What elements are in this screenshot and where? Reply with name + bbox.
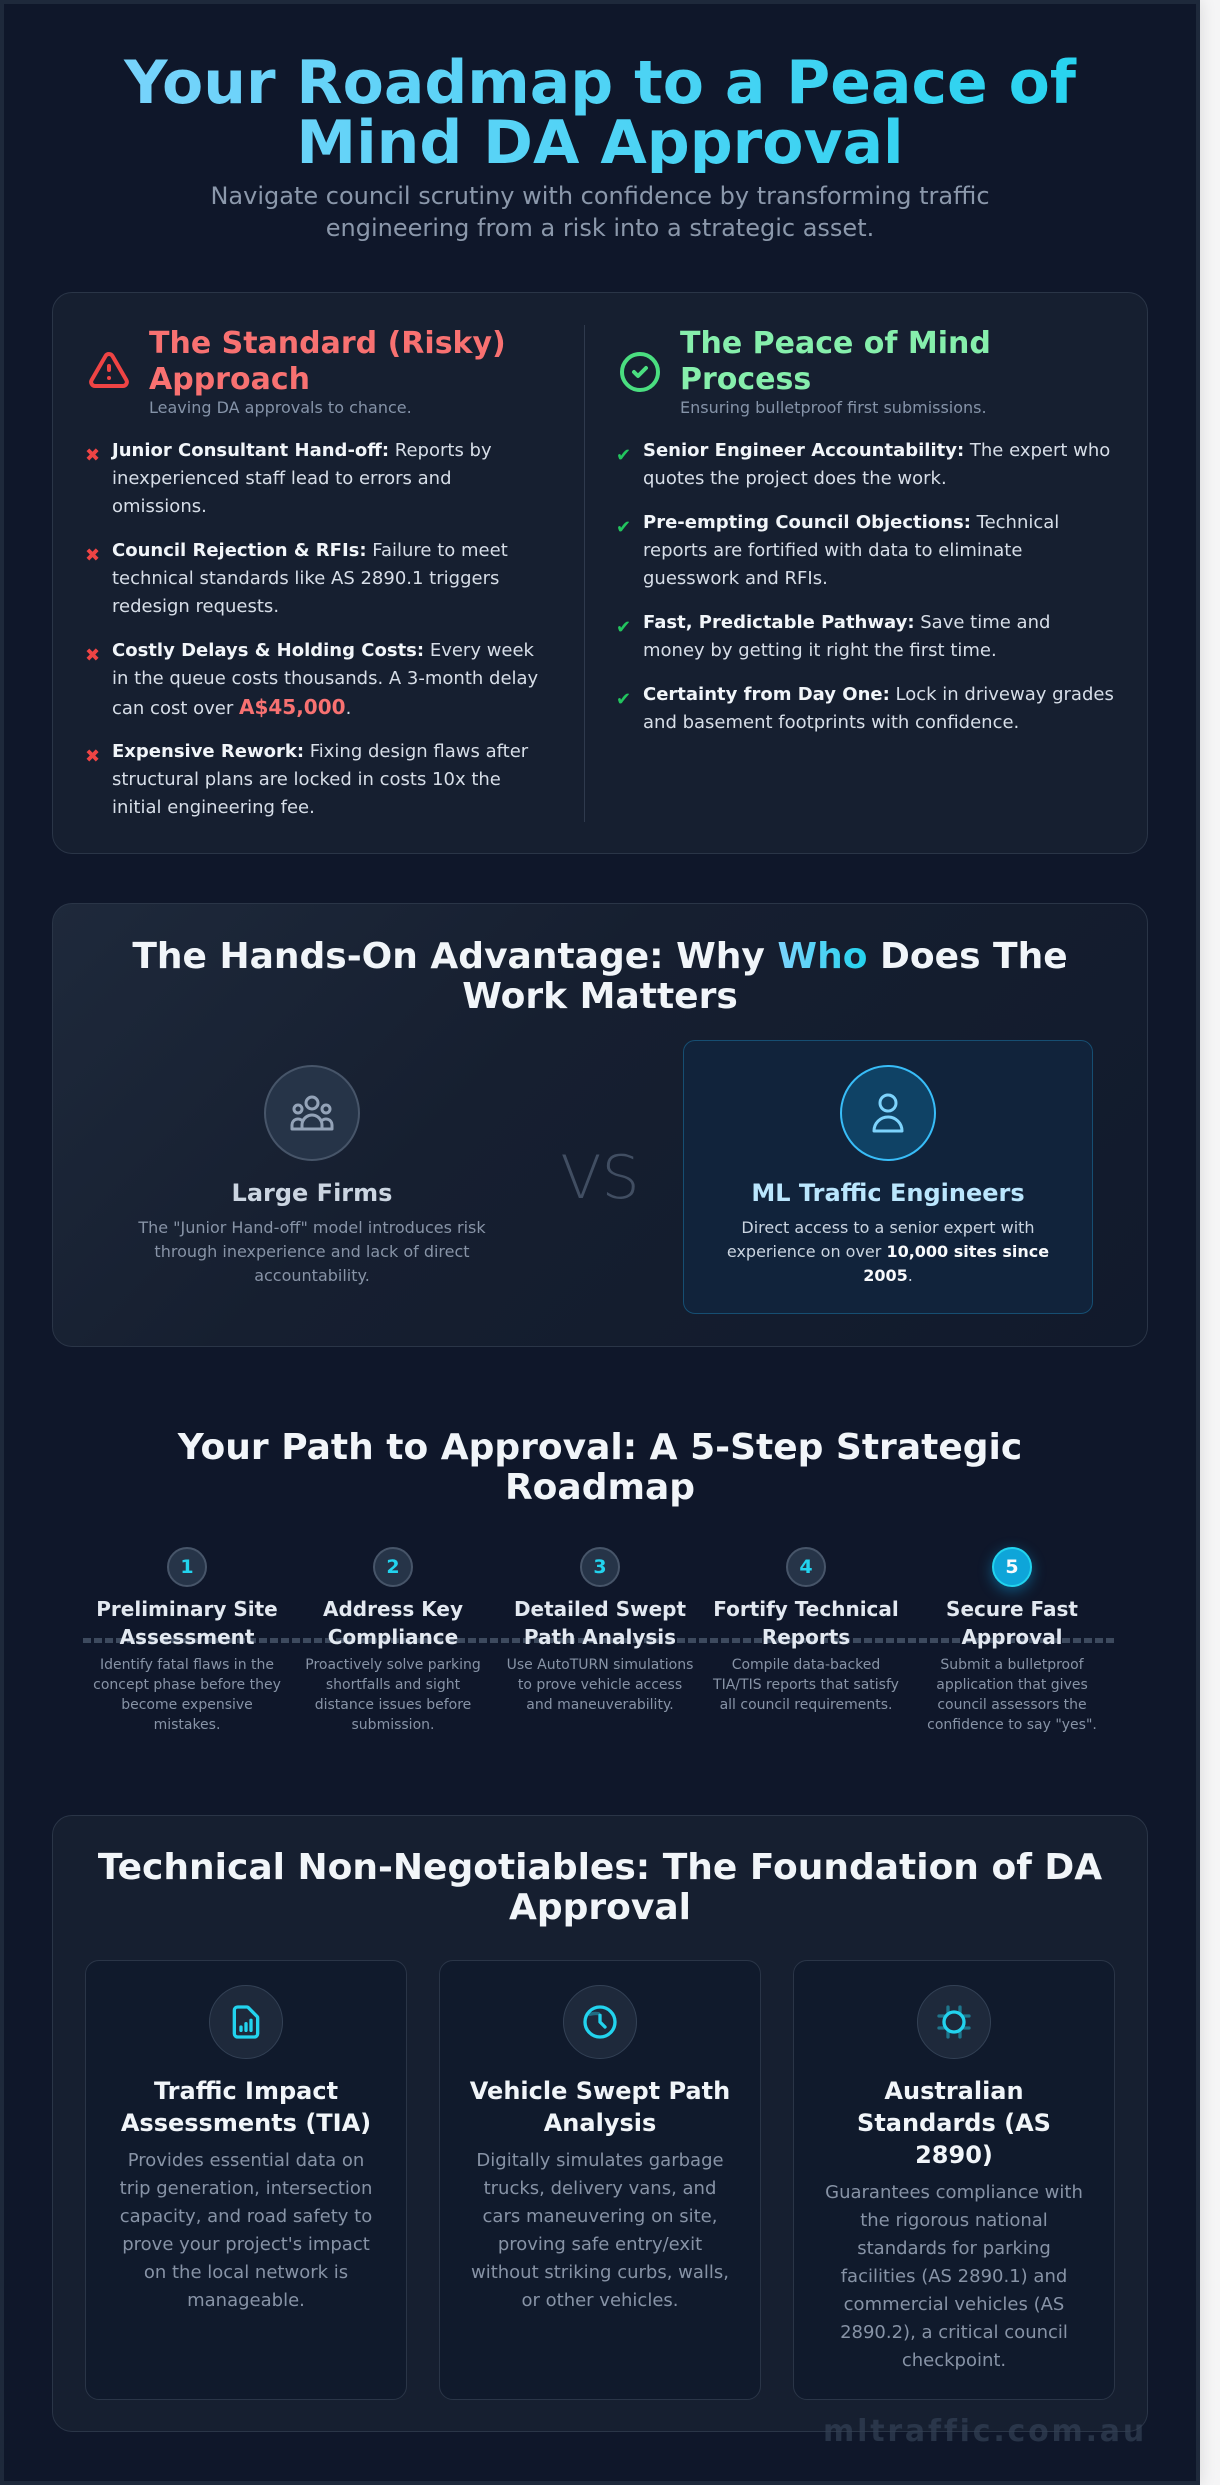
card text: trip generation, intersection [120, 2178, 372, 2199]
heading: standard approach [149, 326, 506, 397]
card title: Traffic Impact [154, 2077, 338, 2105]
title: Your Roadmap to a Peace of [124, 48, 1076, 118]
heading: hands-on advantage: The Hands-On Advantage: Why Who Does The [132, 936, 1068, 977]
subtitle [210, 182, 990, 242]
card title [857, 2077, 1051, 2169]
heading: path to approval: Roadmap [505, 1467, 695, 1508]
step text 4: all council requirements. [720, 1697, 892, 1713]
card text: capacity, and road safety to [120, 2206, 372, 2227]
marker: cross 2: ✖ [85, 545, 100, 566]
card title: Analysis [544, 2109, 656, 2137]
step number 5 [992, 1547, 1032, 1587]
subheading: standard approach: Leaving DA approvals to chance. [149, 398, 412, 417]
card text: manageable. [187, 2290, 305, 2311]
step title 5 [946, 1597, 1078, 1649]
step text 3: and maneuverability. [526, 1697, 674, 1713]
heading: technical non-negotiables: Technical Non-Negotiables: The Foundation of DA [98, 1847, 1102, 1888]
icon: warning triangle [89, 352, 129, 388]
text: large firms [138, 1218, 486, 1285]
step number 5: 5 [1005, 1556, 1019, 1578]
text: ML Traffic Engineers: experience on over 10,000 sites since [727, 1242, 1049, 1261]
card: vehicle swept path [439, 1960, 761, 2400]
step text 1 [93, 1657, 281, 1733]
card title: Assessments (TIA) [121, 2109, 371, 2137]
icon: single person [840, 1065, 936, 1161]
heading: peace of mind: Process [680, 362, 811, 397]
heading: peace of mind: The Peace of Mind [680, 326, 991, 361]
step text 4: Compile data-backed [732, 1657, 880, 1673]
card: ML Traffic Engineers [683, 1040, 1093, 1314]
step 2 [305, 1547, 481, 1733]
card text: trucks, delivery vans, and [484, 2178, 716, 2199]
item: costly delays: can cost over A$45,000. [112, 695, 351, 719]
step text 5: council assessors the [937, 1697, 1087, 1713]
card text [471, 2150, 729, 2311]
step text 5: confidence to say "yes". [927, 1717, 1097, 1733]
heading: technical non-negotiables [98, 1847, 1102, 1928]
step title 5: Approval [961, 1625, 1063, 1649]
icon: document chart [209, 1985, 283, 2059]
marker: check 3: ✔ [616, 617, 631, 638]
text: ML Traffic Engineers: Direct access to a senior expert with [741, 1218, 1035, 1237]
heading: peace of mind [680, 326, 991, 397]
marker: check 2: ✔ [616, 517, 631, 538]
item: senior engineer: quotes the project does the work. [643, 468, 947, 489]
item: senior engineer [643, 440, 1110, 489]
subtitle: engineering from a risk into a strategic asset. [326, 214, 874, 242]
marker: check 4: ✔ [616, 689, 631, 710]
step number 3 [580, 1547, 620, 1587]
step title 2: Address Key [323, 1597, 463, 1621]
step text 2: Proactively solve parking [305, 1657, 481, 1673]
item: certainty: Certainty from Day One: Lock in driveway grades [643, 684, 1114, 705]
step text 5 [927, 1657, 1097, 1733]
item: expensive rework [112, 741, 528, 818]
step 4 [712, 1547, 899, 1713]
heading: hands-on advantage [132, 936, 1068, 1017]
item: certainty: and basement footprints with confidence. [643, 712, 1019, 733]
card text: on the local network is [144, 2262, 348, 2283]
marker: cross 3: ✖ [85, 645, 100, 666]
step number 1 [167, 1547, 207, 1587]
step text 2: submission. [352, 1717, 434, 1733]
item: costly delays: in the queue costs thousands. A 3-month delay [112, 668, 538, 689]
subheading: peace of mind: Ensuring bulletproof first submissions. [680, 398, 987, 417]
item: predictable pathway [643, 612, 1050, 661]
step text 2: distance issues before [315, 1697, 471, 1713]
step text 3: to prove vehicle access [518, 1677, 682, 1693]
card title: 2890) [915, 2141, 993, 2169]
step title 5: Secure Fast [946, 1597, 1078, 1621]
marker: cross 4: ✖ [85, 746, 100, 767]
item: council rejection [112, 540, 508, 617]
text: large firms: The "Junior Hand-off" model introduces risk [138, 1218, 486, 1237]
item: certainty [643, 684, 1114, 733]
step title 2 [323, 1597, 463, 1649]
title: Mind DA Approval [296, 108, 904, 178]
card: australian standards [793, 1960, 1115, 2400]
step title 2: Compliance [328, 1625, 458, 1649]
step 1 [93, 1547, 281, 1733]
text: large firms: accountability. [254, 1266, 370, 1285]
item: predictable pathway: Fast, Predictable Pathway: Save time and [643, 612, 1050, 633]
card text: 2890.2), a critical council [840, 2322, 1068, 2343]
step title 3: Detailed Swept [514, 1597, 686, 1621]
step title 3: Path Analysis [524, 1625, 676, 1649]
item: junior hand-off [111, 440, 492, 517]
card text [794, 2179, 1114, 2375]
heading: path to approval [177, 1427, 1022, 1508]
step number 1: 1 [180, 1556, 194, 1578]
text: large firms: through inexperience and lack of direct [154, 1242, 470, 1261]
item: pre-empting objections: reports are fortified with data to eliminate [643, 540, 1022, 561]
item: council rejection: Council Rejection & RFIs: Failure to meet [112, 540, 508, 561]
marker: check 1: ✔ [616, 445, 631, 466]
heading: ML Traffic Engineers: ML Traffic Engineers [751, 1179, 1025, 1207]
step text 1: mistakes. [154, 1717, 220, 1733]
step number 2: 2 [386, 1556, 400, 1578]
step number 3: 3 [593, 1556, 607, 1578]
item: pre-empting objections: guesswork and RFIs. [643, 568, 828, 589]
step text 1: concept phase before they [93, 1677, 281, 1693]
step text 4: TIA/TIS reports that satisfy [713, 1677, 899, 1693]
step text 1: become expensive [121, 1697, 253, 1713]
step text 2: shortfalls and sight [326, 1677, 460, 1693]
heading: technical non-negotiables: Approval [509, 1887, 691, 1928]
icon: clock [563, 1985, 637, 2059]
panel: technical non-negotiables [52, 1815, 1148, 2432]
card text: commercial vehicles (AS [844, 2294, 1064, 2315]
step text 5: Submit a bulletproof [940, 1657, 1084, 1673]
subtitle: Navigate council scrutiny with confidence by transforming traffic [210, 182, 990, 210]
divider [584, 325, 585, 822]
VS label: VS [560, 1143, 640, 1213]
step 5 [927, 1544, 1097, 1733]
list: peace of mind items [616, 440, 1114, 733]
card text: cars maneuvering on site, [483, 2206, 717, 2227]
item: expensive rework: Expensive Rework: Fixing design flaws after [112, 741, 528, 762]
icon: check circle [620, 352, 660, 392]
card text: facilities (AS 2890.1) and [841, 2266, 1067, 2287]
heading: standard approach: Approach [149, 362, 310, 397]
card title [470, 2077, 730, 2137]
step text 3: Use AutoTURN simulations [507, 1657, 693, 1673]
card text: or other vehicles. [521, 2290, 679, 2311]
text: ML Traffic Engineers: 2005. [863, 1266, 913, 1285]
step text 4 [712, 1657, 899, 1713]
item: senior engineer: Senior Engineer Accountability: The expert who [643, 440, 1110, 461]
card text: Guarantees compliance with [825, 2182, 1083, 2203]
item: council rejection: redesign requests. [112, 596, 279, 617]
watermark: mltraffic.com.au [823, 2414, 1147, 2449]
item: junior hand-off: inexperienced staff lead to errors and [112, 468, 452, 489]
card text: standards for parking [857, 2238, 1051, 2259]
icon: standards cog [917, 1985, 991, 2059]
item: council rejection: technical standards like AS 2890.1 triggers [112, 568, 499, 589]
heading: standard approach: The Standard (Risky) [149, 326, 506, 361]
icon: large firms group [264, 1065, 360, 1161]
item: expensive rework: initial engineering fee. [112, 797, 315, 818]
roadmap connector line [83, 1638, 1117, 1643]
step title 4: Reports [762, 1625, 850, 1649]
item: pre-empting objections [643, 512, 1059, 589]
step title 3 [514, 1597, 686, 1649]
item: pre-empting objections: Pre-empting Council Objections: Technical [643, 512, 1059, 533]
card text: proving safe entry/exit [498, 2234, 702, 2255]
item: costly delays [112, 640, 538, 719]
step title 4 [713, 1597, 899, 1649]
item: predictable pathway: money by getting it right the first time. [643, 640, 997, 661]
step number 2 [373, 1547, 413, 1587]
card text: checkpoint. [902, 2350, 1006, 2371]
card title: Australian [884, 2077, 1024, 2105]
heading: hands-on advantage: Work Matters [462, 976, 738, 1017]
text: ML Traffic Engineers [727, 1218, 1049, 1285]
step text 2 [305, 1657, 481, 1733]
heading: path to approval: Your Path to Approval: A 5-Step Strategic [178, 1427, 1022, 1468]
card title: Vehicle Swept Path [470, 2077, 730, 2105]
item: junior hand-off: omissions. [112, 496, 207, 517]
item: costly delays: Costly Delays & Holding Costs: Every week [112, 640, 534, 661]
card text: without striking curbs, walls, [471, 2262, 729, 2283]
item: expensive rework: structural plans are locked in costs 10x the [112, 769, 501, 790]
card text: prove your project's impact [122, 2234, 370, 2255]
list: risky approach items [85, 440, 538, 818]
heading: large firms: Large Firms [232, 1179, 392, 1207]
step 3 [507, 1547, 693, 1713]
step text 1: Identify fatal flaws in the [100, 1657, 274, 1673]
panel: hands-on advantage [52, 903, 1148, 1347]
item: junior hand-off: Junior Consultant Hand-off: Reports by [112, 440, 492, 461]
step title 1: Assessment [120, 1625, 254, 1649]
card text: Provides essential data on [128, 2150, 364, 2171]
card text [120, 2150, 372, 2311]
step text 3 [507, 1657, 693, 1713]
step title 1: Preliminary Site [96, 1597, 278, 1621]
panel: approach comparison [52, 292, 1148, 854]
step title 4: Fortify Technical [713, 1597, 899, 1621]
step number 4: 4 [799, 1556, 813, 1578]
step title 1 [96, 1597, 278, 1649]
card title: Standards (AS [857, 2109, 1051, 2137]
card: traffic impact assessments [85, 1960, 407, 2400]
card title [121, 2077, 371, 2137]
title [52, 53, 1148, 173]
step text 5: application that gives [936, 1677, 1088, 1693]
card text: the rigorous national [860, 2210, 1048, 2231]
card text: Digitally simulates garbage [476, 2150, 724, 2171]
marker: cross 1: ✖ [85, 445, 100, 466]
step number 4 [786, 1547, 826, 1587]
